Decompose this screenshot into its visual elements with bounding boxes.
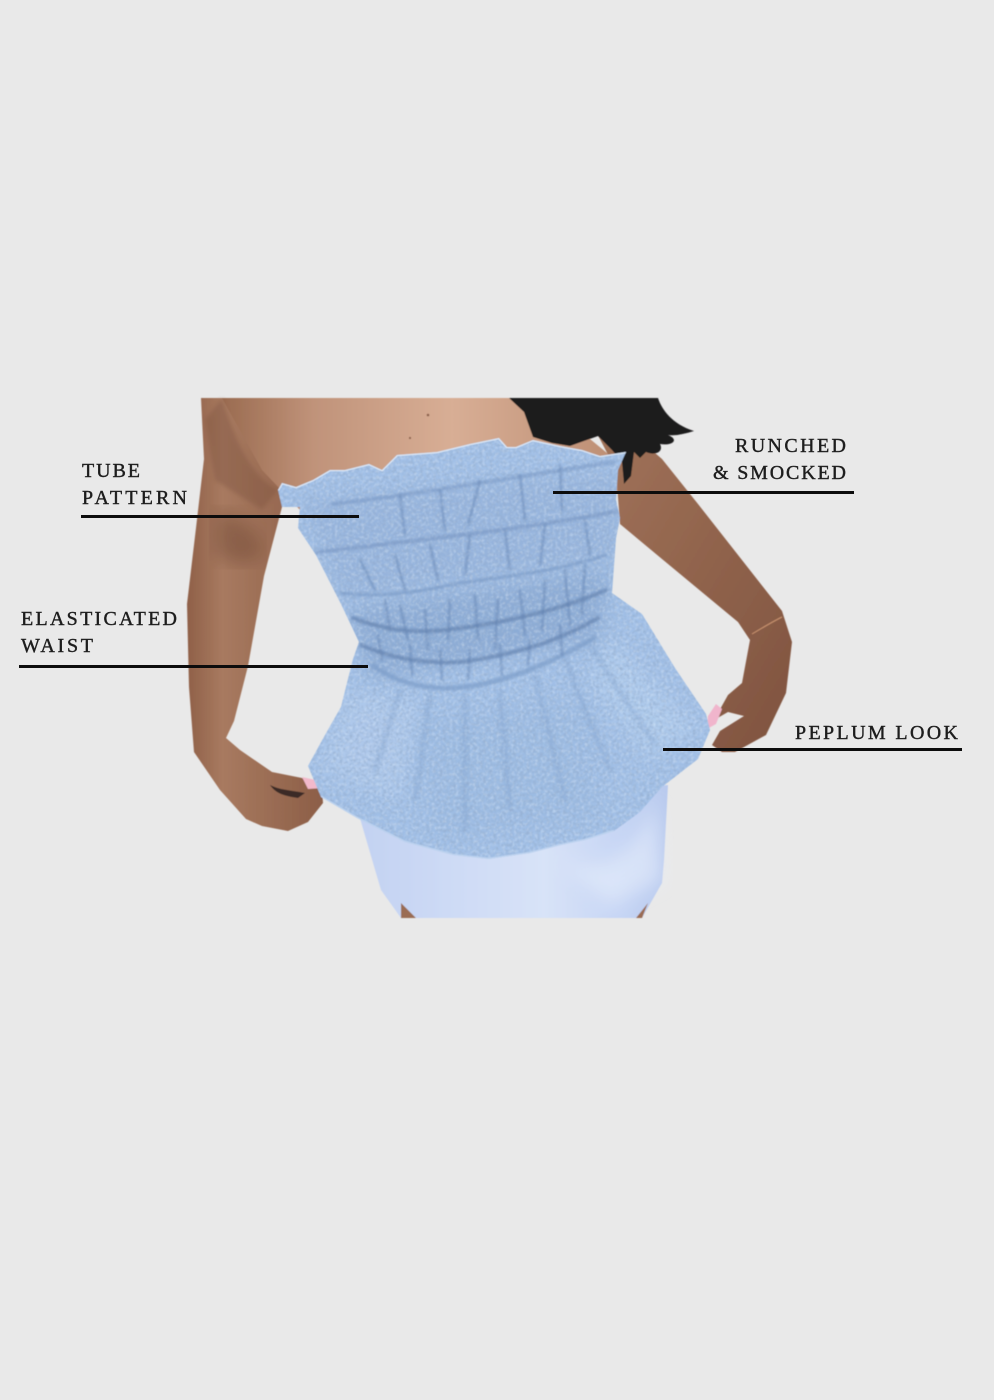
gathers <box>360 465 590 680</box>
skirt <box>359 785 668 918</box>
hair <box>509 398 694 484</box>
ruffle edge <box>278 438 626 490</box>
shading <box>316 480 685 787</box>
label: elasticated waist: WAIST <box>21 635 93 657</box>
seams <box>317 462 618 688</box>
label: runched and smocked: RUNCHED <box>735 435 846 457</box>
label: elasticated waist: ELASTICATED <box>21 608 177 630</box>
label: tube pattern: PATTERN <box>82 487 187 509</box>
peplum folds <box>375 645 655 830</box>
label: tube pattern: TUBE <box>82 460 140 482</box>
label: elasticated waist <box>19 608 368 668</box>
label: peplum look: PEPLUM LOOK <box>795 722 959 744</box>
label: tube pattern <box>81 460 359 518</box>
crinkle texture <box>282 440 710 855</box>
right arm and hand <box>590 420 792 752</box>
label: peplum look <box>663 722 962 751</box>
left arm and hand <box>187 398 330 831</box>
blue smocked top <box>270 430 720 870</box>
model figure with top <box>187 398 792 918</box>
label: runched and smocked: & SMOCKED <box>713 462 846 484</box>
chest <box>205 398 640 510</box>
label: runched and smocked <box>553 435 854 494</box>
